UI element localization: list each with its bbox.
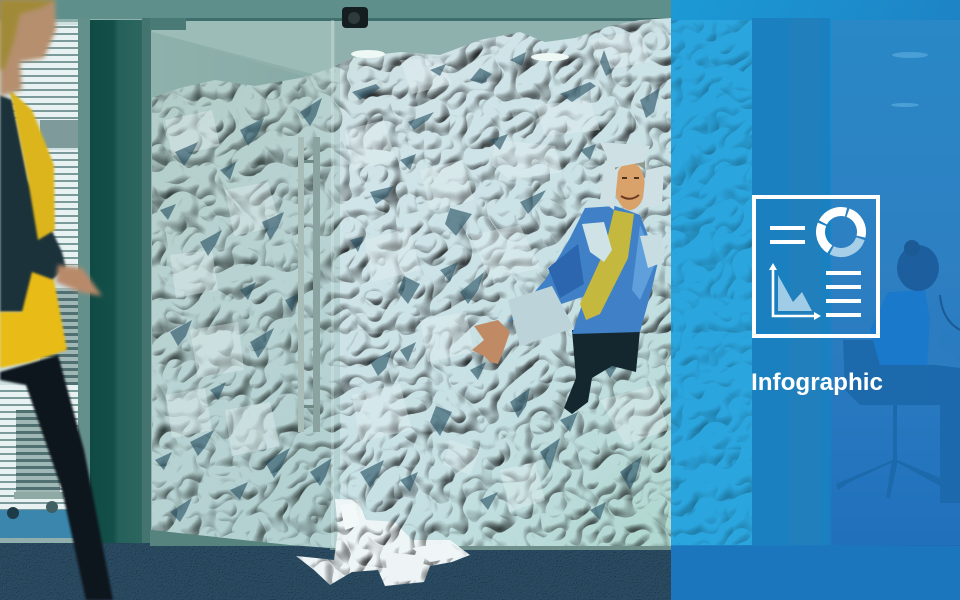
ceiling lights xyxy=(351,50,569,61)
woman's hand xyxy=(56,265,102,296)
icon area chart xyxy=(769,263,821,320)
greener tint on the lower and left paper xyxy=(152,64,340,548)
woman's jacket xyxy=(0,95,66,312)
security camera xyxy=(342,7,368,28)
carpet xyxy=(0,543,671,600)
door bottom rail xyxy=(150,530,671,550)
heading: Infographic xyxy=(751,369,883,396)
man's trousers xyxy=(564,330,640,414)
icon long lines xyxy=(826,271,861,317)
icon short lines xyxy=(770,226,805,244)
woman's legs xyxy=(0,355,113,600)
icon donut chart xyxy=(820,211,862,253)
dark creases xyxy=(155,50,660,522)
overlay ceiling lights xyxy=(891,52,928,107)
man in the paper xyxy=(472,142,664,414)
overlay head xyxy=(897,245,939,291)
woman's hair xyxy=(0,0,56,70)
overlay arm xyxy=(928,296,960,368)
paper over the shirt xyxy=(582,222,612,262)
man's head xyxy=(600,142,664,210)
green column xyxy=(78,18,186,546)
woman's head xyxy=(0,0,56,96)
man's tie xyxy=(580,210,634,320)
icon frame xyxy=(754,197,878,336)
overlay desk xyxy=(940,365,960,503)
overlay seated woman xyxy=(836,240,960,503)
wall of crumpled paper xyxy=(150,15,671,550)
woman's yellow top xyxy=(8,88,55,240)
overlay shirt xyxy=(870,290,930,365)
overlay column xyxy=(752,18,830,545)
overlay paper texture xyxy=(671,20,752,545)
man's hand xyxy=(472,320,510,364)
overlay chair xyxy=(836,340,945,498)
walking woman xyxy=(0,0,113,600)
overlay glass xyxy=(832,20,960,545)
window with blinds xyxy=(0,22,78,542)
overlay floor xyxy=(671,546,960,600)
light paper sheets xyxy=(165,30,668,512)
blue overlay panel xyxy=(671,0,960,600)
infographic icon xyxy=(754,197,878,336)
man's shirt xyxy=(508,206,658,334)
pile of paper on floor xyxy=(296,499,470,586)
door glass and handle xyxy=(298,20,334,546)
